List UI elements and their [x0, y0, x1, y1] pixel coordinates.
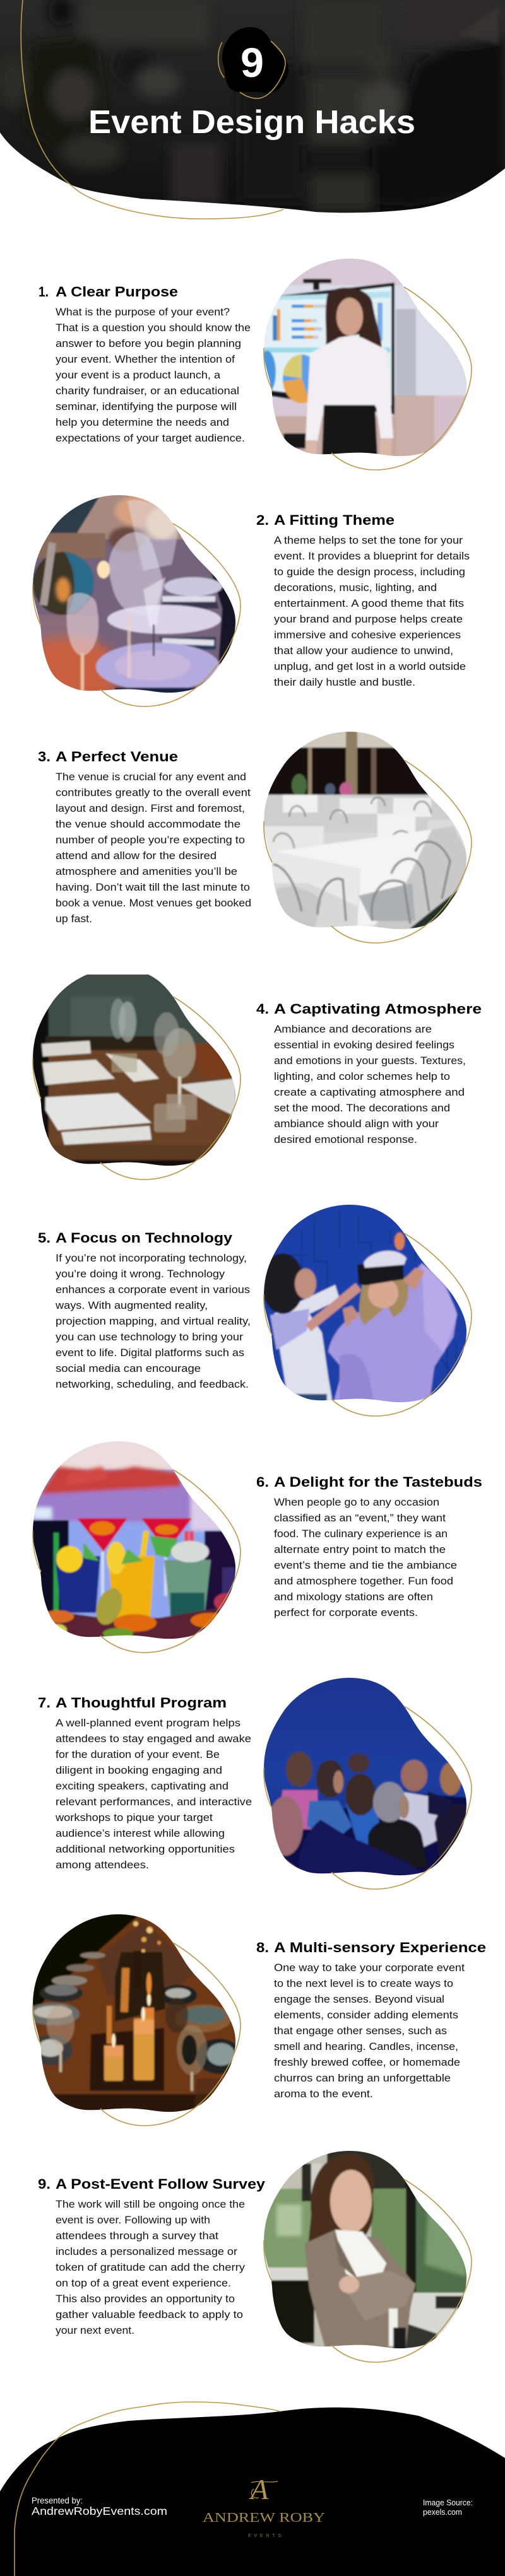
- heading: 3: A Perfect Venue: [56, 749, 178, 764]
- text block: 9: This also provides an opportunity to: [56, 2293, 235, 2305]
- photo: table setting with glasses: [14, 492, 241, 706]
- credit: presented by: AndrewRobyEvents.com: [32, 2505, 167, 2517]
- text block: 1: answer to before you begin planning: [56, 338, 241, 349]
- text block: 1: That is a question you should know the: [56, 322, 251, 334]
- photo: presenter at screen: [258, 255, 472, 470]
- text block: 9: on top of a great event experience.: [56, 2278, 231, 2289]
- text block: 3: [56, 771, 251, 925]
- logo: Andrew Roby Events: ANDREW ROBY: [203, 2510, 325, 2525]
- text block: 4: desired emotional response.: [274, 1134, 417, 1145]
- text block: 7: attendees to stay engaged and awake: [56, 1733, 251, 1745]
- text block: 8: freshly brewed coffee, or homemade: [274, 2057, 460, 2068]
- heading: 5: A Focus on Technology: [56, 1230, 233, 1246]
- text block: 3: atmosphere and amenities you’ll be: [56, 866, 237, 877]
- text block: 8: aroma to the event.: [274, 2088, 373, 2100]
- text block: 1: expectations of your target audience.: [56, 433, 245, 444]
- heading: 7: A Thoughtful Program: [56, 1695, 227, 1711]
- text block: 8: smell and hearing. Candles, incense,: [274, 2041, 458, 2052]
- heading: 6: 6.: [256, 1474, 269, 1490]
- text block: 3: the venue should accommodate the: [56, 819, 241, 830]
- panel: 4 A Captivating Atmosphere: [30, 965, 482, 1180]
- text block: 7: diligent in booking engaging and: [56, 1765, 222, 1776]
- text block: 7: relevant performances, and interactive: [56, 1796, 252, 1808]
- text block: 2: immersive and cohesive experiences: [274, 629, 461, 641]
- text block: 9: your next event.: [56, 2325, 134, 2336]
- panel: 6 A Delight for the Tastebuds: [30, 1438, 482, 1653]
- text block: 7: among attendees.: [56, 1859, 149, 1871]
- text block: 4: [274, 1024, 466, 1145]
- text block: 4: lighting, and color schemes help to: [274, 1071, 450, 1082]
- text block: 2: [274, 535, 470, 688]
- photo: cocktails: [30, 1438, 241, 1653]
- text block: 6: perfect for corporate events.: [274, 1607, 418, 1619]
- panel: 5 A Focus on Technology: [38, 1202, 472, 1416]
- text block: 3: contributes greatly to the overall event: [56, 787, 251, 799]
- header gold curve: [21, 0, 283, 219]
- text block: 1: help you determine the needs and: [56, 417, 229, 428]
- text block: 6: food. The culinary experience is an: [274, 1528, 448, 1540]
- text block: 7: A well-planned event program helps: [56, 1718, 241, 1729]
- text block: 9: gather valuable feedback to apply to: [56, 2309, 243, 2321]
- text block: 5: enhances a corporate event in various: [56, 1284, 250, 1296]
- text block: 4: ambiance should align with your: [274, 1118, 439, 1130]
- badge: number 9: [218, 27, 288, 98]
- text block: 5: networking, scheduling, and feedback.: [56, 1379, 249, 1390]
- panel: 1 A Clear Purpose: [39, 255, 472, 470]
- text block: 2: their daily hustle and bustle.: [274, 677, 415, 688]
- text block: 3: attend and allow for the desired: [56, 850, 217, 862]
- text block: 5: you can use technology to bring your: [56, 1332, 244, 1343]
- text block: 2: A theme helps to set the tone for your: [274, 535, 463, 546]
- panel: 7 A Thoughtful Program: [38, 1675, 472, 1889]
- heading: 8: 8.: [256, 1940, 269, 1955]
- text block: 7: additional networking opportunities: [56, 1844, 235, 1855]
- heading: 1: A Clear Purpose: [56, 284, 178, 300]
- credit: presented by: Presented by:: [32, 2496, 83, 2505]
- text block: 7: audience’s interest while allowing: [56, 1828, 225, 1839]
- text block: 4: essential in evoking desired feelings: [274, 1039, 454, 1051]
- heading: 4: 4.: [256, 1001, 269, 1017]
- heading: 1: 1.: [39, 284, 49, 300]
- text block: 9: [56, 2199, 246, 2336]
- text block: 7: workshops to pique your target: [55, 1812, 213, 1824]
- text block: 2: decorations, music, lighting, and: [274, 582, 437, 594]
- text block: 7: [55, 1718, 252, 1871]
- text block: 6: event’s theme and tie the ambiance: [274, 1560, 457, 1571]
- photo: white outdoor tables: [261, 729, 472, 943]
- heading: 7: 7.: [38, 1695, 50, 1711]
- text block: 8: that engage other senses, such as: [274, 2025, 447, 2037]
- title: Event Design Hacks: [88, 104, 415, 141]
- text block: 2: unplug, and get lost in a world outside: [274, 661, 466, 672]
- text block: 2: your brand and purpose helps create: [274, 614, 463, 625]
- credit: image source: [423, 2498, 473, 2517]
- panel: 9 A Post-Event Follow Survey: [38, 2148, 473, 2362]
- text block: 1: your event. Whether the intention of: [56, 354, 235, 365]
- text block: 8: to the next level is to create ways to: [274, 1978, 453, 1989]
- heading: 9: 9.: [38, 2176, 50, 2192]
- text block: 8: One way to take your corporate event: [274, 1962, 465, 1974]
- text block: 6: alternate entry point to match the: [274, 1544, 446, 1555]
- text block: 3: The venue is crucial for any event and: [56, 771, 246, 783]
- heading: 3: 3.: [38, 749, 50, 764]
- text block: 9: includes a personalized message or: [56, 2246, 238, 2257]
- photo: smiling businesswoman: [261, 2148, 473, 2362]
- text block: 5: you’re doing it wrong. Technology: [56, 1268, 225, 1280]
- text block: 2: event. It provides a blueprint for details: [274, 551, 470, 562]
- text block: 1: seminar, identifying the purpose will: [56, 401, 237, 413]
- text block: 6: and atmosphere together. Fun food: [274, 1576, 453, 1587]
- text block: 3: number of people you’re expecting to: [56, 834, 245, 846]
- logo: Andrew Roby Events: A: [249, 2473, 269, 2505]
- text block: 5: [55, 1253, 251, 1390]
- text block: 6: classified as an “event,” they want: [274, 1513, 446, 1524]
- text block: 5: social media can encourage: [56, 1363, 201, 1374]
- text block: 4: create a captivating atmosphere and: [274, 1087, 465, 1098]
- text block: 8: churros can bring an unforgettable: [274, 2073, 451, 2084]
- panel: 2 A Fitting Theme: [14, 492, 470, 706]
- heading: 9: A Post-Event Follow Survey: [56, 2176, 266, 2192]
- credit: image source: Image Source:: [423, 2498, 473, 2507]
- panel: 8 A Multi-sensory Experience: [27, 1911, 486, 2126]
- text block: 7: exciting speakers, captivating and: [56, 1781, 229, 1792]
- heading: 8: A Multi-sensory Experience: [274, 1940, 486, 1955]
- photo: restaurant table with wine glasses: [30, 965, 241, 1180]
- text block: 9: token of gratitude can add the cherry: [56, 2262, 246, 2273]
- text block: 3: book a venue. Most venues get booked: [56, 898, 251, 909]
- text block: 1: charity fundraiser, or an educational: [56, 385, 239, 397]
- text block: 5: event to life. Digital platforms such as: [56, 1347, 244, 1359]
- text block: 6: and mixology stations are often: [274, 1591, 433, 1603]
- text block: 1: What is the purpose of your event?: [56, 307, 230, 318]
- text block: 4: and emotions in your guests. Textures,: [274, 1055, 466, 1067]
- text block: 8: engage the senses. Beyond visual: [274, 1994, 444, 2005]
- text block: 3: up fast.: [56, 913, 92, 925]
- text block: 3: having. Don’t wait till the last minute to: [56, 882, 250, 893]
- text block: 1: your event is a product launch, a: [56, 370, 221, 381]
- credit: presented by: [32, 2496, 167, 2517]
- panel: 3 A Perfect Venue: [38, 729, 472, 943]
- footer panel: [0, 2402, 505, 2576]
- text block: 4: set the mood. The decorations and: [274, 1103, 450, 1114]
- text block: 2: to guide the design process, including: [274, 566, 465, 578]
- header banner photo: [0, 0, 505, 218]
- text block: 9: attendees through a survey that: [56, 2230, 218, 2242]
- heading: 5: 5.: [38, 1230, 50, 1246]
- text block: 5: ways. With augmented reality,: [55, 1300, 208, 1311]
- heading: 6: A Delight for the Tastebuds: [274, 1474, 482, 1490]
- text block: 6: [274, 1497, 457, 1619]
- heading: 2: A Fitting Theme: [274, 512, 395, 528]
- logo: Andrew Roby Events: EVENTS: [248, 2534, 281, 2538]
- text block: 9: event is over. Following up with: [56, 2215, 210, 2226]
- heading: 4: A Captivating Atmosphere: [274, 1001, 482, 1017]
- text block: 2: entertainment. A good theme that fits: [274, 598, 464, 609]
- credit: image source: pexels.com: [423, 2507, 462, 2517]
- logo: Andrew Roby Events: [203, 2473, 325, 2538]
- text block: 8: elements, consider adding elements: [274, 2010, 458, 2021]
- text block: 2: that allow your audience to unwind,: [274, 645, 453, 657]
- text block: 4: Ambiance and decorations are: [274, 1024, 432, 1035]
- text block: 3: layout and design. First and foremost,: [56, 803, 245, 814]
- text block: 8: [274, 1962, 465, 2100]
- heading: 2: 2.: [256, 512, 269, 528]
- photo: seated audience: [261, 1675, 472, 1889]
- badge: number 9: 9: [241, 39, 264, 86]
- photo: VR headset: [261, 1202, 472, 1416]
- photo: candle-lit table: [27, 1911, 242, 2126]
- text block: 1: [56, 307, 251, 444]
- text block: 7: for the duration of your event. Be: [56, 1749, 220, 1760]
- text block: 5: If you’re not incorporating technology,: [56, 1253, 247, 1264]
- text block: 5: projection mapping, and virtual reality,: [56, 1316, 251, 1327]
- text block: 9: The work will still be ongoing once the: [56, 2199, 245, 2210]
- text block: 6: When people go to any occasion: [274, 1497, 439, 1508]
